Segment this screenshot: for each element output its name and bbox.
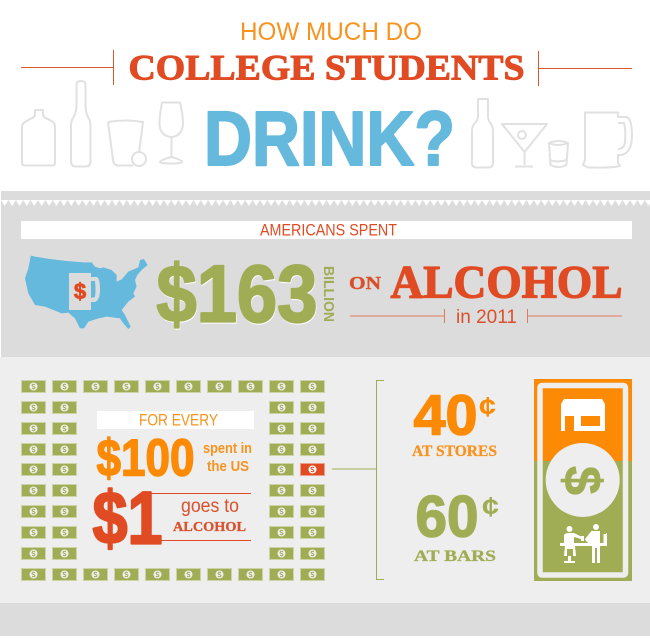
banner: americans spent [21,221,632,240]
stat: $100 spent in the us: $100 [96,430,194,488]
banner: for every: FOR EVERY [139,412,218,430]
banner: for every [97,411,254,430]
icon: cup and ball [108,120,146,166]
connector bracket [332,380,384,580]
text: on alcohol in 2011: ON [349,273,381,293]
stat: $1 goes to alcohol [92,476,251,560]
big number: $163 billion: $163 [156,250,318,340]
icon: us map with beer mug: $ [74,279,86,304]
text: on alcohol in 2011 [349,256,622,328]
stat: 60 cents at bars [414,484,499,565]
chart: grid of dollar bills [22,380,324,580]
panel: spending background [1,191,650,357]
icon: wine glass [160,102,183,164]
title line: drink: DRINK? [204,96,455,182]
stat: $1 goes to alcohol: ALCOHOL [173,520,246,535]
stat: 40 cents at stores: ¢ [479,391,496,422]
icon: jug [22,110,55,166]
big number: $163 billion: BILLION [320,266,337,322]
footer band [0,603,650,636]
stat: $1 goes to alcohol: goes to [181,496,239,517]
header: title [21,18,632,182]
stat: 60 cents at bars: 60 [416,484,478,550]
text: on alcohol in 2011: in 2011 [456,307,517,328]
icon: us map with beer mug [25,256,148,329]
icons: drink outlines [22,81,632,168]
right title rule [538,51,632,86]
banner: americans spent: AMERICANS SPENT [260,222,397,240]
icon: split dollar bill [534,379,632,581]
red highlighted bill [300,464,324,476]
icon: people at bar [560,524,607,563]
text: on alcohol in 2011: ALCOHOL [390,256,622,308]
stat: 60 cents at bars: ¢ [482,491,499,522]
icon: martini glass [502,124,547,166]
icon: shot glass [549,141,568,167]
icon: beer bottle [472,99,493,168]
icon: wine bottle [71,81,90,166]
stat: 40 cents at stores: 40 [414,384,478,448]
stat: 60 cents at bars: AT BARS [414,548,496,565]
stat: $100 spent in the us: the US [207,459,249,475]
left title rule [21,50,114,85]
stat: 40 cents at stores [412,384,497,460]
title line: college students: COLLEGE STUDENTS [128,48,524,88]
stat: 40 cents at stores: AT STORES [412,443,497,460]
icon: beer mug [583,112,632,168]
panel: breakdown background [0,357,650,603]
icon: storefront [561,399,605,431]
big number: $163 billion: $163 [157,250,318,340]
title line: how much do: HOW MUCH DO [240,18,422,46]
stat: $100 spent in the us: spent in [203,441,252,457]
stat: $1 goes to alcohol: $1 [92,476,162,560]
icon: split dollar bill: $ [553,466,611,495]
